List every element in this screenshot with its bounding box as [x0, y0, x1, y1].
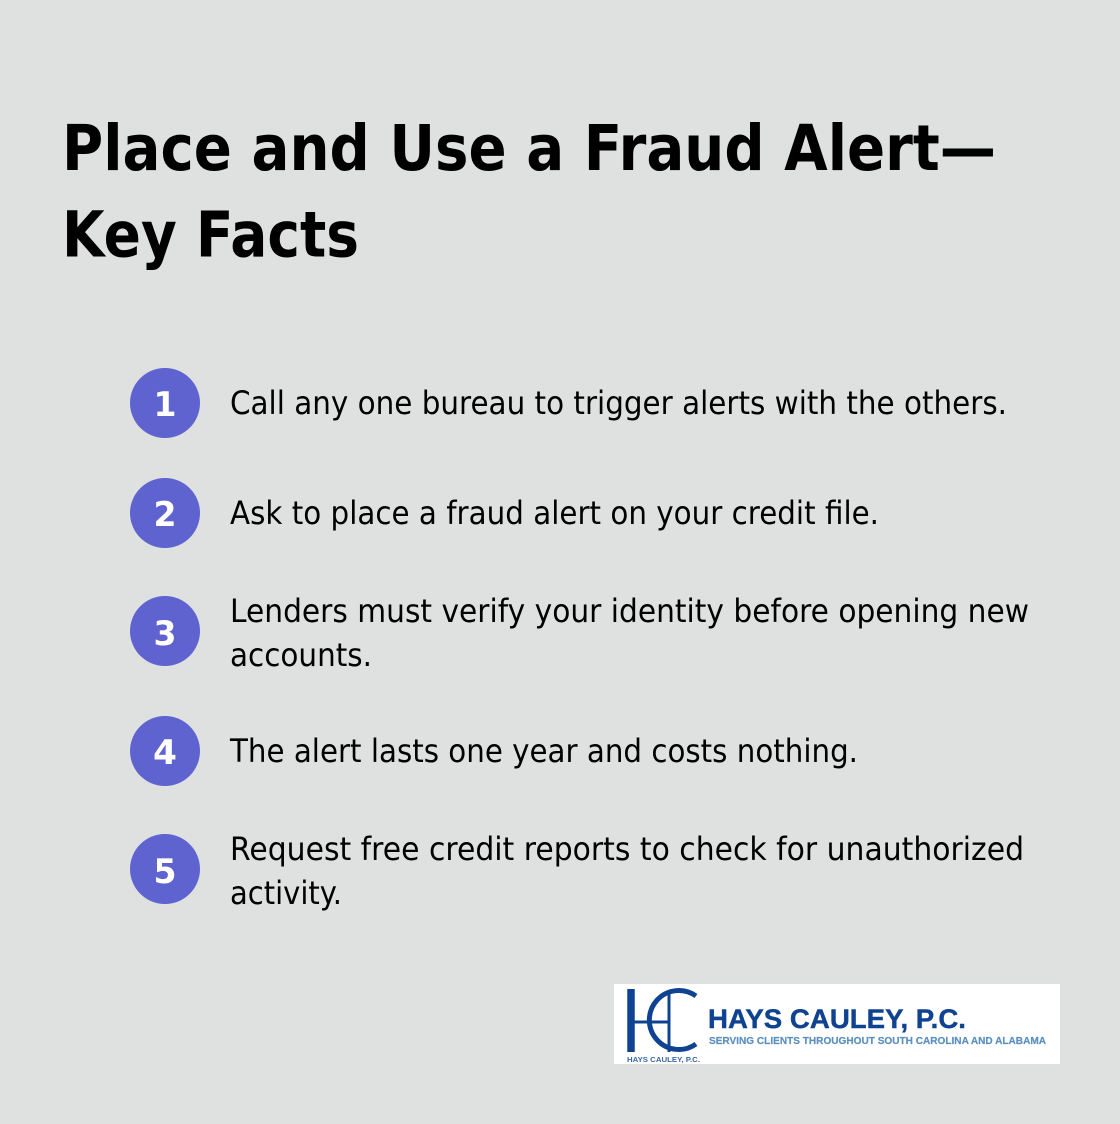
- fact 5: activity.: [230, 874, 342, 912]
- fact 2: [130, 478, 879, 548]
- fact 3: [130, 592, 1029, 674]
- fact 3: 3: [154, 614, 176, 654]
- logo tagline: SERVING CLIENTS THROUGHOUT SOUTH CAROLINA AND ALABAMA: [709, 1035, 1046, 1047]
- fact 2: 2: [154, 495, 176, 535]
- logo name: HAYS CAULEY, P.C.: [708, 1004, 966, 1034]
- list of key facts: [130, 368, 1029, 912]
- logo: Hays Cauley, P.C.: [614, 984, 1060, 1064]
- title: Key Facts: [62, 198, 359, 272]
- fact 5: [130, 830, 1024, 912]
- title: Place and Use a Fraud Alert—: [62, 112, 996, 185]
- fact 2: Ask to place a fraud alert on your credit file.: [230, 494, 879, 532]
- icon: HC monogram: [631, 989, 696, 1052]
- fact 5: 5: [154, 852, 176, 892]
- fact 3: accounts.: [230, 636, 372, 674]
- fact 3: Lenders must verify your identity before opening new: [230, 592, 1029, 630]
- fact 5: Request free credit reports to check for unauthorized: [230, 830, 1024, 868]
- fact 4: The alert lasts one year and costs nothing.: [229, 732, 858, 770]
- fact 4: 4: [153, 733, 177, 773]
- fact 4: [130, 716, 858, 786]
- logo small caption: HAYS CAULEY, P.C.: [627, 1055, 700, 1064]
- fact 1: [130, 368, 1007, 438]
- fact 1: 1: [154, 385, 176, 425]
- fact 1: Call any one bureau to trigger alerts with the others.: [230, 384, 1007, 422]
- title: [62, 112, 996, 272]
